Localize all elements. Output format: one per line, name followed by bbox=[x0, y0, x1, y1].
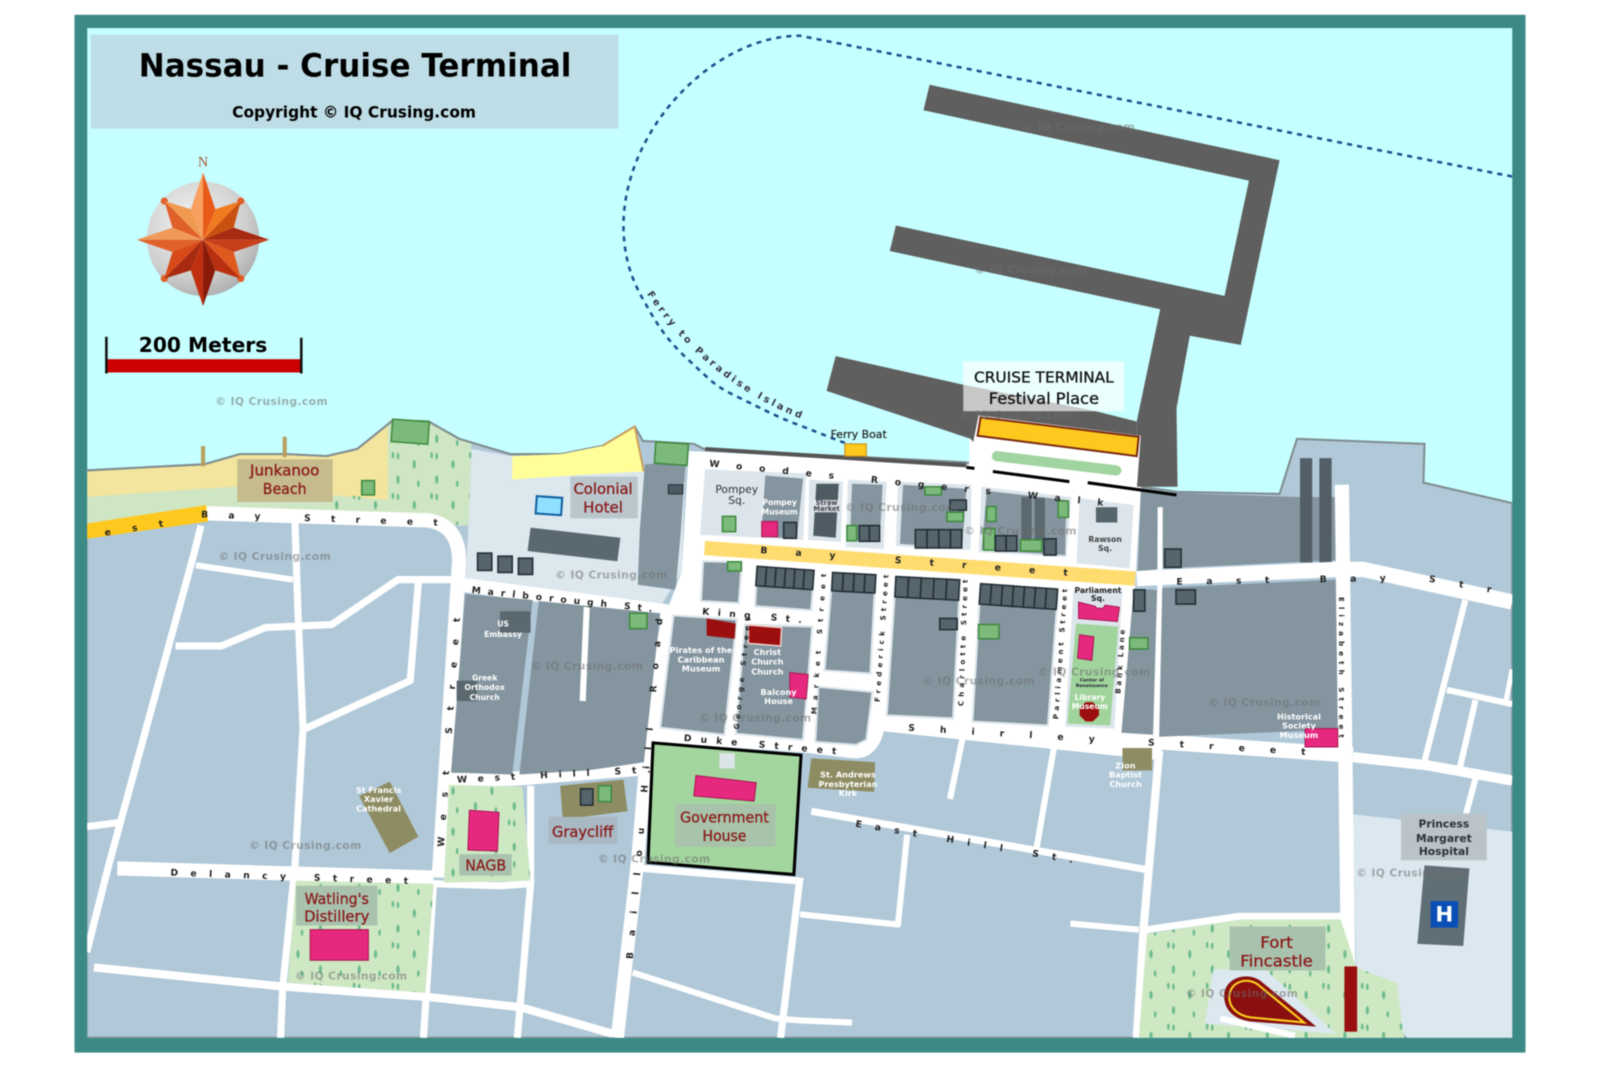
ferry route label: Ferry to Paradise Island bbox=[646, 290, 804, 419]
Pirates of the Caribbean Museum: Pirates of the bbox=[670, 645, 733, 655]
Straw Market block: Straw bbox=[816, 499, 837, 507]
St Francis Xavier Cathedral: St Francis bbox=[356, 785, 401, 795]
terminal building bbox=[968, 415, 1141, 490]
Zion Baptist Church: Church bbox=[1109, 779, 1142, 789]
street labels: Bank Lane bbox=[1113, 629, 1127, 694]
block G bbox=[1121, 589, 1157, 735]
strips over gray block bbox=[1300, 497, 1332, 562]
street labels: Str bbox=[1428, 574, 1493, 596]
watermarks: © IQ Crusing.com bbox=[1208, 696, 1320, 709]
watermarks: © IQ Crusing.com bbox=[249, 839, 361, 852]
Princess Margaret Hospital: Hospital bbox=[1419, 845, 1469, 858]
Christ Church and Balcony House: House bbox=[764, 696, 793, 706]
block B bbox=[755, 566, 814, 610]
St. Andrews Presbyterian Kirk: Presbyterian bbox=[818, 779, 878, 789]
Graycliff bbox=[548, 780, 628, 844]
street labels: Elizabeth Street bbox=[1337, 597, 1346, 738]
watermarks: © IQ Crusing.com bbox=[1038, 666, 1150, 679]
street labels: Market Street bbox=[809, 573, 828, 714]
Pompey Square block: Museum bbox=[761, 507, 798, 516]
Zion Baptist Church: Baptist bbox=[1109, 770, 1142, 780]
Christ Church and Balcony House bbox=[736, 625, 812, 740]
watermarks: © IQ Crusing.com bbox=[218, 550, 331, 563]
Junkanoo Beach label bbox=[237, 459, 333, 502]
street labels: Bay Street bbox=[201, 509, 438, 529]
St Francis Xavier Cathedral bbox=[356, 782, 418, 853]
street labels: Bay Street bbox=[760, 545, 1069, 579]
block A bbox=[701, 561, 742, 603]
Fort Fincastle bbox=[1139, 919, 1404, 1038]
street labels: Frederick Street bbox=[873, 574, 891, 702]
Pompey Square block bbox=[700, 469, 806, 540]
ferry route bbox=[623, 36, 1512, 446]
Greek Orthodox Church: Orthodox bbox=[465, 683, 505, 692]
Pirates of the Caribbean Museum: Caribbean bbox=[678, 654, 725, 664]
small block bbox=[815, 687, 872, 745]
cruise terminal label: Festival Place bbox=[989, 389, 1099, 408]
street labels: Parliament Street bbox=[1051, 588, 1069, 720]
West Bay Street highlighted bbox=[87, 505, 208, 539]
watermarks: © IQ Crusing.com bbox=[555, 569, 667, 582]
watermarks: © IQ Crusing.com bbox=[1022, 121, 1135, 134]
street labels: Marlborough St. bbox=[471, 585, 653, 615]
Historical Society Museum: Museum bbox=[1280, 730, 1318, 740]
St Francis Xavier Cathedral: Cathedral bbox=[356, 803, 401, 813]
Christ Church and Balcony House: Church bbox=[751, 667, 784, 677]
street labels: Delancy Street bbox=[170, 868, 409, 887]
hospital grounds bbox=[1353, 814, 1512, 1038]
Pompey Square block: Pompey bbox=[715, 483, 759, 496]
scale bar bbox=[105, 333, 303, 373]
street labels: Charlotte Street bbox=[956, 579, 970, 706]
Greek Orthodox Church bbox=[457, 674, 505, 702]
US Embassy bbox=[484, 611, 531, 639]
Fort Fincastle: Fort bbox=[1260, 933, 1293, 952]
land base bbox=[87, 420, 1512, 1038]
seawall bbox=[705, 449, 1177, 495]
watermarks: © IQ Crusing.com bbox=[1186, 987, 1298, 1000]
Greek Orthodox Church: Greek bbox=[472, 674, 498, 683]
Junkanoo Beach label: Junkanoo bbox=[249, 462, 319, 480]
Parliament Square: Renaissance bbox=[1076, 683, 1108, 689]
pier bbox=[890, 85, 1280, 487]
Bay Street highlighted bbox=[704, 541, 1136, 586]
hotel grounds bbox=[465, 449, 686, 612]
street labels: West Hill St. bbox=[457, 765, 651, 786]
Princess Margaret Hospital: Princess bbox=[1418, 818, 1469, 831]
Watling's Distillery: Watling's bbox=[305, 890, 369, 908]
downtown ground bbox=[653, 439, 1163, 760]
hotel cabanas bbox=[478, 553, 533, 575]
wharf road bbox=[1159, 507, 1160, 760]
Greek Orthodox Church: Church bbox=[470, 693, 500, 702]
Pompey Square block: Pompey bbox=[762, 498, 797, 507]
west block 2 bbox=[519, 601, 660, 775]
Straw Market block bbox=[808, 480, 843, 542]
cruise terminal label: CRUISE TERMINAL bbox=[974, 369, 1114, 387]
street labels: East Bay bbox=[1176, 573, 1386, 588]
St. Andrews Presbyterian Kirk: St. Andrews bbox=[820, 770, 876, 780]
watermarks: © IQ Crusing.com bbox=[974, 263, 1087, 276]
watermarks: © IQ Crusing.com bbox=[922, 675, 1035, 688]
watermarks: © IQ Crusing.com bbox=[1356, 867, 1468, 880]
Pirates of the Caribbean Museum bbox=[660, 615, 737, 735]
east large block bbox=[1159, 580, 1338, 737]
Watling's Distillery: Distillery bbox=[304, 907, 369, 925]
watermarks: © IQ Crusing.com bbox=[845, 501, 957, 514]
beach sand bbox=[87, 420, 393, 502]
street labels: Shirley Street bbox=[908, 723, 1306, 758]
terminal roof bbox=[978, 417, 1139, 456]
wharf dark strips bbox=[1300, 458, 1332, 562]
lower pier bbox=[827, 356, 1137, 449]
Fort Fincastle: Fincastle bbox=[1240, 951, 1313, 970]
Princess Margaret Hospital bbox=[1401, 813, 1487, 946]
Parliament Square: Parliament bbox=[1074, 586, 1122, 595]
watermarks bbox=[215, 121, 1468, 1000]
green squares on shore bbox=[362, 419, 688, 629]
west block 1 bbox=[451, 594, 533, 775]
compass rose bbox=[137, 154, 269, 306]
St. Andrews Presbyterian Kirk: Kirk bbox=[839, 788, 858, 798]
street labels bbox=[104, 458, 1493, 960]
hotel beach edge bbox=[602, 427, 644, 471]
Parliament Square: Museum bbox=[1072, 702, 1108, 711]
Christ Church and Balcony House: Balcony bbox=[761, 687, 797, 697]
Government House: Government bbox=[680, 808, 769, 826]
Christ Church and Balcony House: Christ bbox=[754, 647, 781, 657]
block C bbox=[824, 572, 876, 674]
street labels: King St. bbox=[702, 606, 802, 626]
Pirates of the Caribbean Museum: Museum bbox=[682, 663, 720, 673]
street labels: Baillou Hill Road bbox=[625, 618, 665, 960]
east block building bbox=[1176, 590, 1195, 604]
Zion Baptist Church: Zion bbox=[1115, 760, 1136, 770]
watermarks: © IQ Crusing.com bbox=[964, 525, 1077, 538]
compass rose: N bbox=[198, 154, 208, 170]
NAGB bbox=[444, 785, 531, 883]
Parliament Square: Sq. bbox=[1091, 594, 1105, 603]
cruise terminal label bbox=[963, 361, 1124, 411]
coastline bbox=[86, 420, 470, 472]
east gray block bbox=[1138, 492, 1336, 571]
Zion Baptist Church bbox=[1109, 748, 1152, 789]
watermarks: © IQ Crusing.com bbox=[295, 970, 407, 983]
street labels: George Street bbox=[732, 617, 753, 730]
Straw Market block: Market bbox=[813, 505, 840, 513]
US Embassy: Embassy bbox=[484, 630, 522, 639]
St. Andrews Presbyterian Kirk bbox=[808, 758, 878, 798]
watermarks: © IQ Crusing.com bbox=[531, 659, 643, 672]
Watling's Distillery bbox=[288, 881, 434, 993]
Parliament Square: Center of bbox=[1080, 678, 1105, 684]
St Francis Xavier Cathedral: Xavier bbox=[364, 794, 393, 804]
block 3 bbox=[846, 480, 887, 549]
Colonial Hotel: Hotel bbox=[583, 498, 623, 516]
ferry boat bbox=[831, 428, 887, 456]
Princess Margaret Hospital: Margaret bbox=[1416, 832, 1472, 845]
ferry boat: Ferry Boat bbox=[831, 428, 887, 441]
scale bar: 200 Meters bbox=[139, 333, 267, 357]
roads bbox=[87, 485, 1512, 1038]
hotel building bbox=[528, 528, 620, 561]
Historical Society Museum: Society bbox=[1282, 721, 1317, 731]
beach park bbox=[87, 420, 471, 526]
Historical Society Museum bbox=[1277, 711, 1338, 747]
block 4 bbox=[896, 482, 971, 550]
terminal lawn bbox=[997, 456, 1116, 470]
title: Nassau - Cruise Terminal bbox=[139, 49, 571, 85]
Historical Society Museum: Historical bbox=[1277, 711, 1321, 721]
NAGB: NAGB bbox=[465, 856, 506, 874]
copyright: Copyright © IQ Crusing.com bbox=[232, 102, 476, 121]
Government House bbox=[648, 743, 801, 875]
street labels: East Hill St. bbox=[855, 819, 1074, 866]
beach poles bbox=[201, 437, 287, 466]
Rawson Square: Rawson bbox=[1088, 535, 1122, 544]
Government House: House bbox=[703, 827, 746, 845]
hotel beach bbox=[512, 427, 644, 480]
watermarks: © IQ Crusing.com bbox=[960, 408, 1072, 421]
wharf building bbox=[1165, 549, 1181, 567]
block E bbox=[972, 584, 1058, 726]
Rawson Square: Sq. bbox=[1098, 544, 1112, 553]
Christ Church and Balcony House: Church bbox=[751, 656, 784, 666]
Colonial Hotel: Colonial bbox=[573, 480, 633, 498]
US Embassy: US bbox=[497, 620, 509, 629]
watermarks: © IQ Crusing.com bbox=[598, 852, 710, 865]
Parliament Square bbox=[1065, 586, 1122, 729]
street labels: Duke Street bbox=[683, 733, 837, 757]
watermarks: © IQ Crusing.com bbox=[699, 711, 811, 724]
hotel pool bbox=[536, 496, 562, 515]
Parliament Square: Library bbox=[1074, 693, 1105, 702]
Pompey Square block: Sq. bbox=[728, 494, 745, 507]
Rawson Square bbox=[1077, 498, 1134, 568]
watermarks: © IQ Crusing.com bbox=[215, 395, 328, 408]
street labels: West Street bbox=[436, 617, 463, 847]
Colonial Hotel bbox=[478, 477, 638, 575]
Princess Margaret Hospital: H bbox=[1435, 902, 1453, 927]
street labels: est bbox=[104, 518, 165, 539]
block D bbox=[887, 577, 960, 718]
hotel gray block bbox=[638, 462, 686, 590]
title panel bbox=[91, 35, 618, 129]
Graycliff: Graycliff bbox=[552, 823, 614, 841]
block 5 bbox=[979, 487, 1071, 557]
Junkanoo Beach label: Beach bbox=[263, 480, 307, 498]
street labels: Woodes Rogers Walk bbox=[709, 458, 1105, 509]
